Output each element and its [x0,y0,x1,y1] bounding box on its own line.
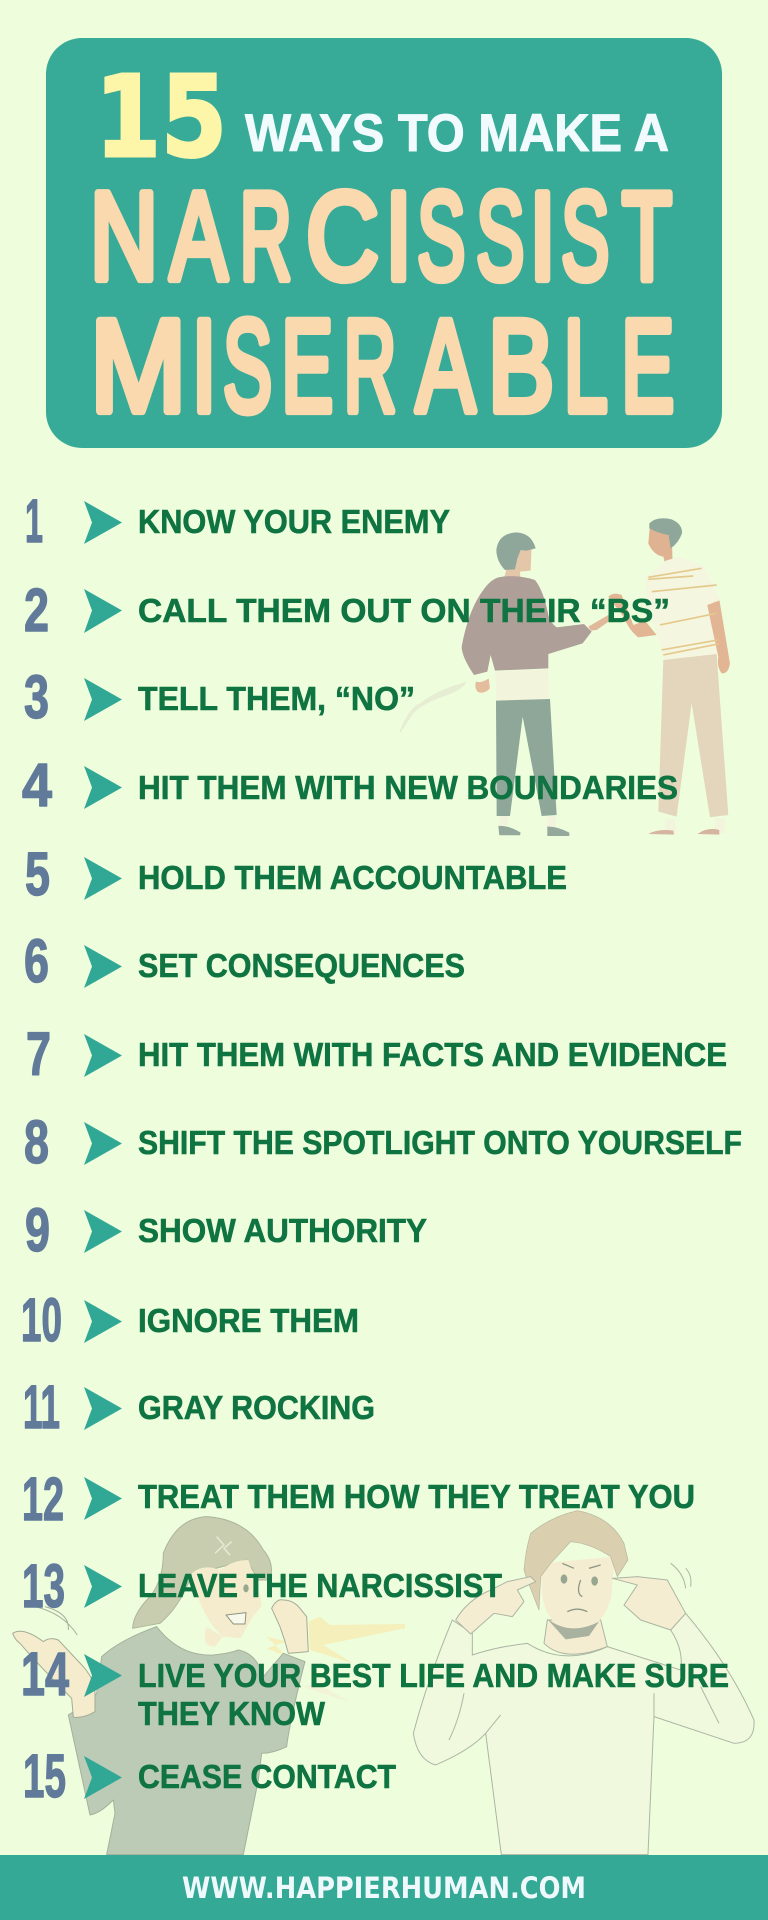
sparks [267,1617,405,1663]
list item 12 [22,1465,695,1533]
list item 9: SHOW AUTHORITY [138,1212,427,1249]
title line: miserable [90,292,674,440]
title line: narcissist: S [417,166,465,306]
left man [462,532,610,836]
list item 15: 15 [23,1742,66,1810]
list item 3: TELL THEM, “NO” [138,680,415,717]
list item 11: 11 [23,1373,60,1441]
list item 13: LEAVE THE NARCISSIST [138,1567,502,1604]
hand left [456,1577,536,1634]
list item 4 [22,751,678,819]
list item 1: KNOW YOUR ENEMY [138,503,450,540]
face [540,1557,615,1635]
list item 13: 13 [22,1552,65,1620]
list item 9 [25,1196,427,1264]
list item 2: 2 [24,576,49,644]
title line: narcissist: S [561,166,609,306]
list item 5: 5 [25,840,50,908]
list item 6: SET CONSEQUENCES [138,947,465,984]
title line: miserable: M [90,293,186,440]
sweater [413,1613,754,1855]
list item 14 [21,1640,729,1732]
list item 3: 3 [24,663,49,731]
title line: miserable: A [416,293,475,439]
list item 15: CEASE CONTACT [138,1758,396,1795]
list item 10: IGNORE THEM [138,1302,359,1339]
panel background [46,38,722,448]
list item 14: 14 [21,1640,69,1708]
title line: narcissist: I [529,166,556,306]
title line: narcissist: R [240,166,292,306]
neck [205,1627,223,1647]
title line: miserable: L [564,292,608,439]
list item 4: HIT THEM WITH NEW BOUNDARIES [138,769,678,806]
illustration: man covering ears [413,1511,754,1855]
list item 13 [22,1552,502,1620]
illustration: angry woman [13,1517,405,1855]
hair [524,1511,628,1610]
title line: ways to make a: WAYS TO MAKE A [245,104,669,163]
eye [243,1584,249,1592]
title line: narcissist: S [476,166,524,306]
list item 12: 12 [22,1465,64,1533]
footer bar [0,1855,768,1920]
list item 14: THEY KNOW [138,1695,326,1732]
footer url: WWW.HAPPIERHUMAN.COM [182,1871,586,1905]
title line: miserable: R [344,293,397,439]
list item 7 [26,1020,727,1088]
title panel [46,38,722,448]
list item 2: CALL THEM OUT ON THEIR “BS” [138,592,670,629]
list item 7: HIT THEM WITH FACTS AND EVIDENCE [138,1036,727,1073]
title line: narcissist: T [622,168,672,306]
title line: narcissist: A [170,166,228,306]
left hand [13,1631,95,1717]
dress [68,1627,305,1855]
neck [544,1620,607,1654]
title line: narcissist [90,166,672,307]
title line: miserable: E [621,293,674,439]
hair [133,1517,271,1628]
list item 4: 4 [22,751,52,819]
list item 9: 9 [25,1196,50,1264]
hand right [612,1577,686,1630]
list item 8 [24,1108,742,1176]
title line: miserable: E [281,292,333,439]
face [192,1560,262,1638]
title line: narcissist: N [90,167,158,306]
title line: miserable: I [191,293,217,439]
anger mark [215,1537,232,1555]
title line: miserable: S [223,293,272,439]
eyes, nose and mouth [562,1563,601,1612]
motion lines [35,1607,77,1635]
list item 1: 1 [25,487,43,555]
beard [547,1618,599,1639]
list item 8: 8 [24,1108,49,1176]
list item 5 [25,840,567,908]
list item 5: HOLD THEM ACCOUNTABLE [138,859,567,896]
motion lines [671,1563,691,1588]
list item 14: LIVE YOUR BEST LIFE AND MAKE SURE [138,1657,729,1694]
list item 6 [24,927,465,995]
sweater folds [449,1687,719,1740]
illustration: two men talking [400,518,730,836]
list item 11: GRAY ROCKING [138,1389,375,1426]
right hand [272,1600,308,1653]
list item 3 [24,663,415,731]
title number 15: 15 [95,53,227,183]
list item 10 [21,1286,359,1354]
title line: miserable: B [488,293,554,439]
title line: narcissist: I [385,166,412,306]
eye dots [561,1574,598,1586]
list item 10: 10 [21,1286,62,1354]
list item 12: TREAT THEM HOW THEY TREAT YOU [138,1478,695,1515]
right man [608,518,730,835]
list item 1 [25,487,450,555]
mouth [226,1613,246,1624]
list item 15 [23,1742,396,1810]
list item 7: 7 [26,1020,51,1088]
list item 6: 6 [24,927,49,995]
title line: narcissist: C [306,167,379,307]
list item 2 [24,576,670,644]
list item 11 [23,1373,375,1441]
smoke wisp [400,682,467,733]
